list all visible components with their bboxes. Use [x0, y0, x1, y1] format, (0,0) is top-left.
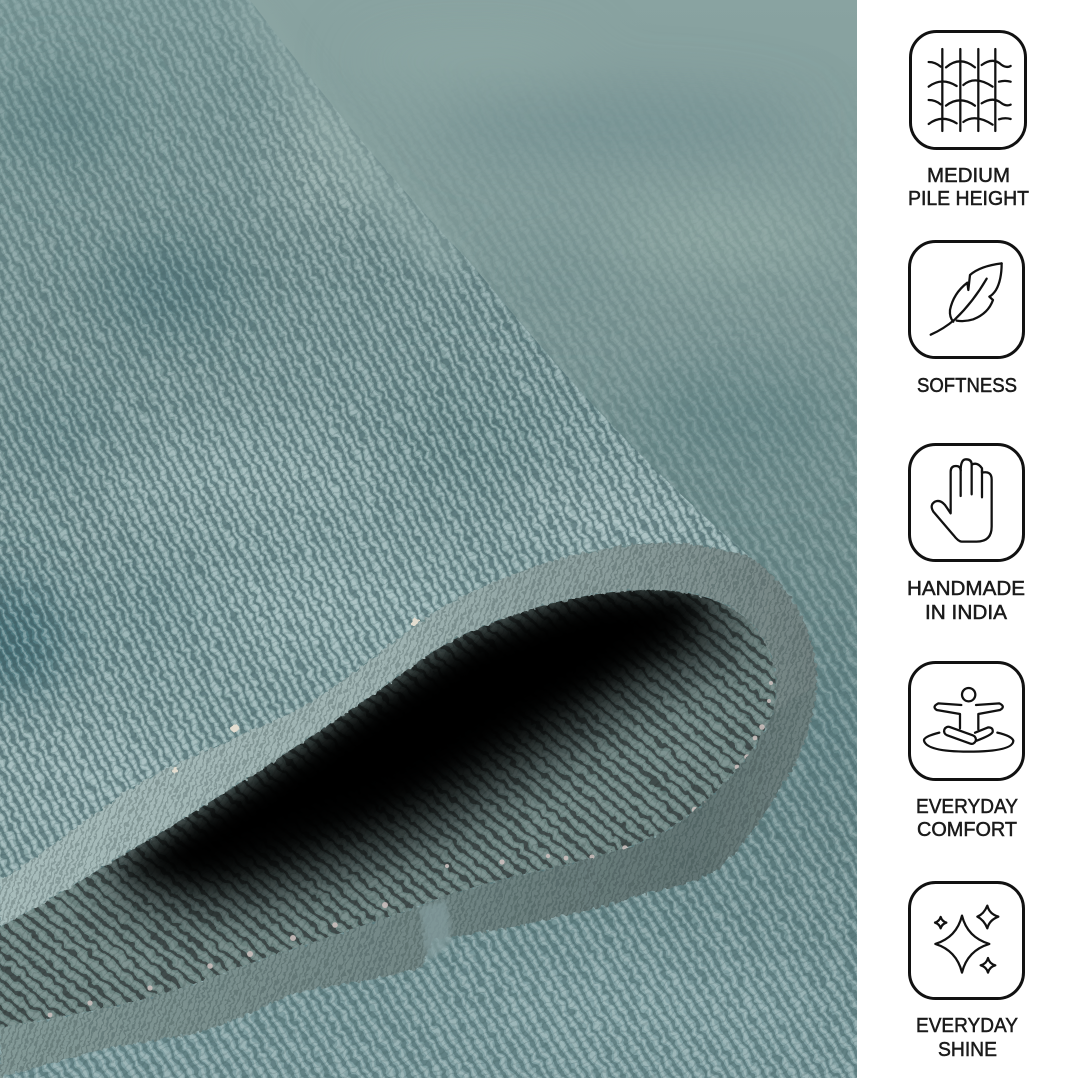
label: medium pile height: MEDIUM	[927, 165, 1010, 187]
rolled rug top surface	[0, 0, 870, 910]
feature: everyday comfort	[910, 662, 1024, 841]
label: handmade in india: HANDMADE	[907, 578, 1025, 600]
label: everyday shine: EVERYDAY	[916, 1015, 1018, 1037]
label: medium pile height: PILE HEIGHT	[908, 188, 1029, 210]
photo: rolled teal rug corner	[0, 0, 857, 1078]
icon: hand	[910, 444, 1024, 560]
label: handmade in india: IN INDIA	[925, 602, 1008, 624]
icon: feather	[910, 242, 1024, 358]
icon: pile weave	[910, 32, 1026, 148]
label: everyday comfort: COMFORT	[917, 819, 1017, 841]
label: everyday comfort: EVERYDAY	[916, 796, 1018, 818]
feature: everyday shine	[910, 882, 1024, 1061]
stitching dots along underside hem	[48, 681, 773, 1017]
feature: softness	[910, 242, 1024, 397]
feature: handmade in india	[907, 444, 1025, 624]
label: everyday shine: SHINE	[938, 1039, 997, 1061]
icon: meditating figure	[910, 662, 1024, 780]
soft fold blur at the top of the roll	[225, 0, 470, 280]
top binding edge of the roll	[0, 543, 817, 927]
label: softness: SOFTNESS	[917, 375, 1017, 397]
feature: medium pile height	[908, 32, 1029, 210]
icon: sparkles	[910, 882, 1024, 998]
dark opening and ribbed underside	[0, 590, 776, 1028]
lower binding cord	[0, 685, 817, 1077]
